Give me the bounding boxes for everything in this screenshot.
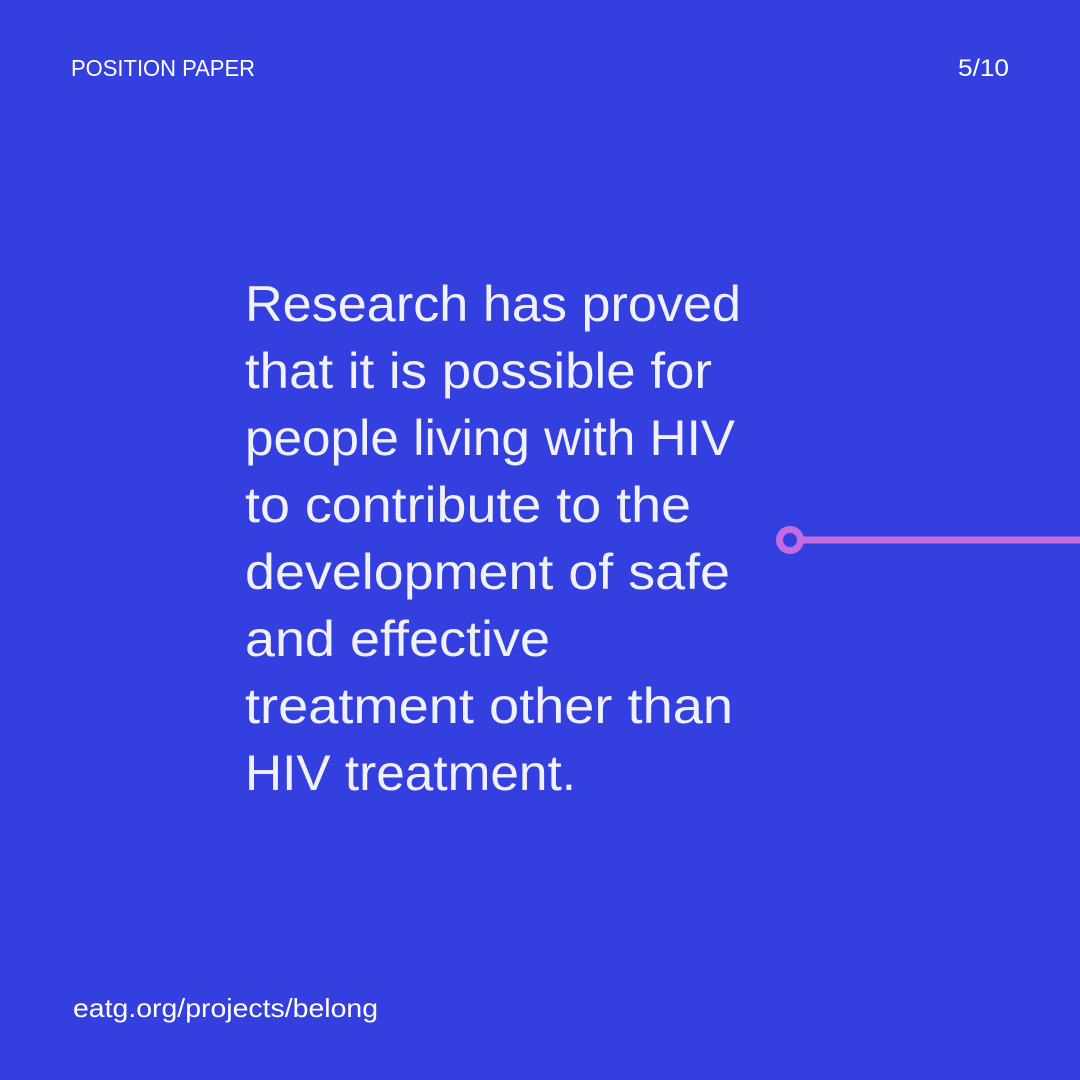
main statement text: HIV treatment.	[245, 745, 576, 801]
main statement text	[245, 276, 741, 801]
main statement text: to contribute to the	[245, 477, 691, 533]
footer url: eatg.org/projects/belong	[73, 993, 378, 1023]
decorative connector: ring and line	[780, 530, 1080, 550]
main statement text: Research has proved	[245, 276, 741, 332]
page number: 5/10	[958, 55, 1009, 82]
main statement text: development of safe	[245, 544, 730, 600]
main statement text: and effective	[245, 611, 550, 667]
main statement text: people living with HIV	[245, 410, 736, 466]
header label: position paper: POSITION PAPER	[71, 55, 255, 81]
main statement text: treatment other than	[245, 678, 733, 734]
main statement text: that it is possible for	[245, 343, 712, 399]
